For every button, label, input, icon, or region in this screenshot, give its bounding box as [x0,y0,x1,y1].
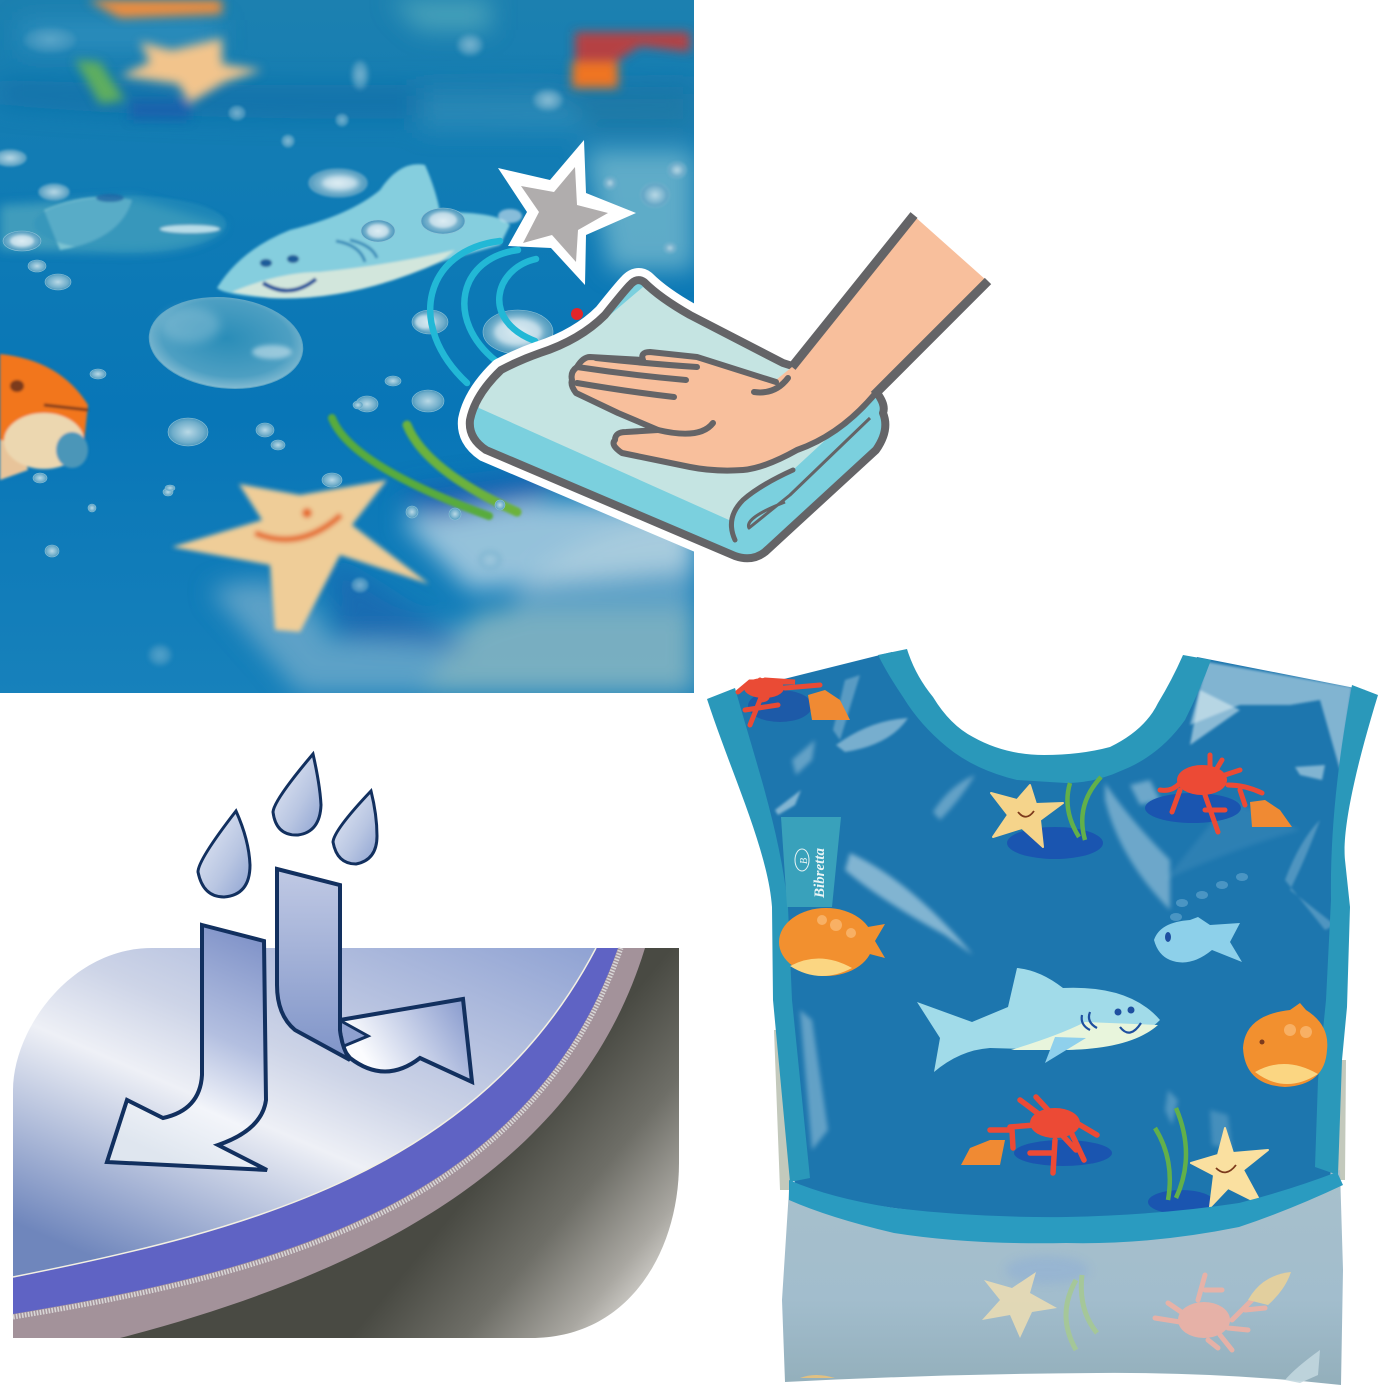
pocket print [800,1256,1320,1383]
brand tag: B [799,858,810,864]
grey backing layer [13,948,645,1338]
beige back showing at sides [774,1030,1346,1190]
bib print: small blue fish [1154,917,1242,962]
large water drop [148,297,304,389]
icon: water drop right [333,791,377,864]
bubbles [1170,873,1248,921]
pocket binding [789,1172,1343,1243]
diagram: water-repellent surface [13,754,679,1338]
icon: clean sparkle star [498,140,636,285]
left blurred fish and drop [34,194,226,252]
left armhole binding [707,688,810,1182]
purple membrane layer [13,948,618,1314]
seaweed on fabric [332,418,517,516]
brand tag [781,817,841,907]
orange fish on fabric [0,354,88,480]
bib print: crab top left [738,678,850,725]
icon: wipe motion arcs [430,241,536,383]
bib print: crab bottom [961,1097,1112,1173]
bib print: orange fish right [1243,1003,1327,1087]
brand tag: Bibretta [812,847,828,899]
starfish on fabric [172,480,429,632]
bib pocket [782,1170,1343,1385]
shark on fabric [217,164,510,298]
droplet highlights [10,176,542,346]
glossy top surface [13,948,596,1277]
icon: wiping hand with cloth [430,140,988,558]
icon: arm and hand [572,215,988,471]
small water droplets [0,28,686,665]
right armhole binding [1315,685,1378,1175]
glossy reflections [775,662,1352,1150]
icon: water drop centre [273,754,321,835]
icon: folded cloth [470,280,885,558]
icon: water drop left [198,811,250,897]
bib product [707,649,1378,1385]
bib print: crab top right [1145,755,1292,832]
photo: water droplets on printed fabric [0,0,694,693]
bib print: shark [917,968,1160,1072]
bib main panel [720,652,1365,1219]
arrow: deflected right [277,869,472,1082]
dark base layer [100,948,679,1338]
neck binding [878,649,1211,783]
arrow: deflected left [107,925,267,1170]
bib print: starfish top [991,777,1103,859]
bib print: starfish bottom right [1148,1108,1268,1214]
stitched edge [13,948,621,1317]
bib print: orange fish left [779,908,885,976]
